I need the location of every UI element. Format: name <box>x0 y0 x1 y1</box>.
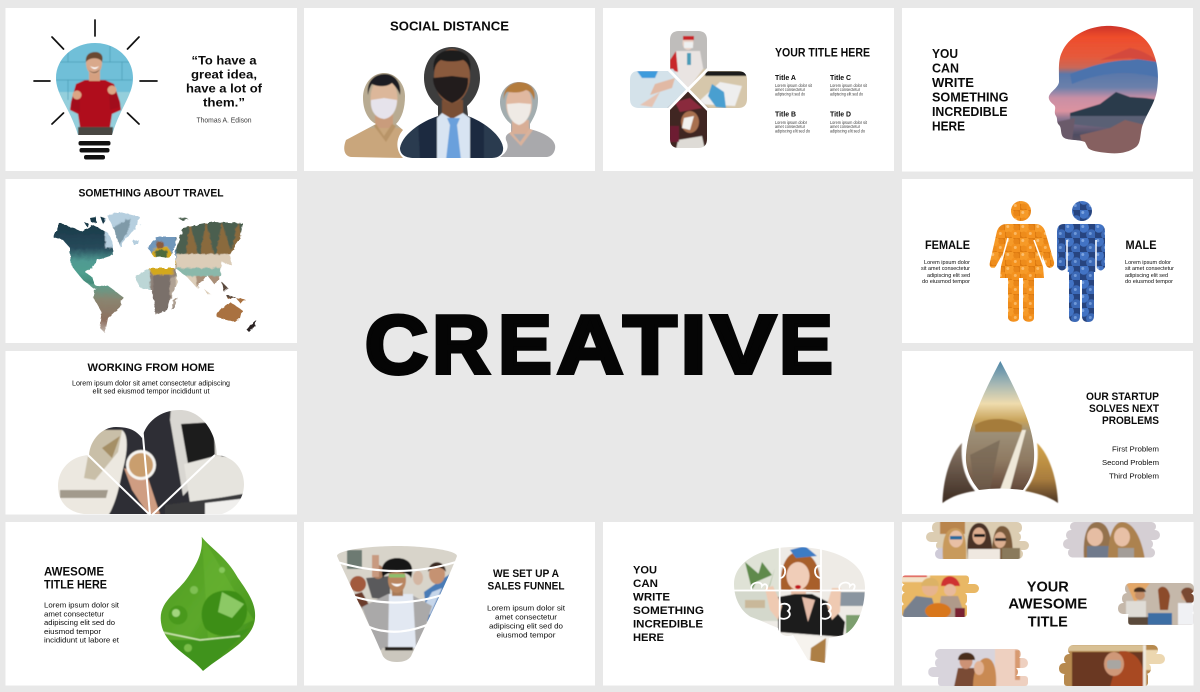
funnel band lines <box>337 562 456 632</box>
main title: A <box>557 298 623 391</box>
list of problems: Second Problem <box>1102 458 1159 467</box>
text block: Title C: Lorem ipsum dolor sit <box>830 83 868 89</box>
main title: R <box>432 298 490 391</box>
text block: YOU <box>932 47 958 61</box>
list of problems: Third Problem <box>1109 472 1159 480</box>
top quadrant: doctor <box>670 31 707 88</box>
text block: Title C <box>830 73 868 98</box>
divider lines in cloud <box>88 425 215 515</box>
quote: great idea, <box>191 68 257 82</box>
panel: head silhouette <box>902 8 1193 172</box>
text block: Title C: adipiscing elit sed do <box>830 92 863 98</box>
text block: female: sit amet consectetur <box>921 266 970 272</box>
heading: WE SET UP A <box>493 568 559 580</box>
icon: funnel photo <box>335 544 459 664</box>
panel: leaf <box>6 522 297 686</box>
heading: female: FEMALE <box>925 240 970 252</box>
main title: I <box>680 298 706 391</box>
heading: male: MALE <box>1126 240 1157 252</box>
text block: incididunt ut labore et <box>44 636 119 644</box>
brush photo: kids with pumpkin <box>902 576 979 617</box>
text block: amet consectetur <box>44 610 105 618</box>
panel: rocket <box>902 351 1193 514</box>
text block <box>487 604 565 640</box>
heading: TITLE <box>1028 614 1068 630</box>
text block: Title B: adipiscing elit sed do <box>775 128 810 134</box>
text block: Title D: adipiscing elit sed do <box>830 128 865 134</box>
text block: Title A: adipiscing it sed do <box>775 92 805 98</box>
rocket body <box>966 361 1034 490</box>
brush photo: friends on floor <box>1118 583 1194 625</box>
icon: bulb photo of cheering man <box>56 43 133 135</box>
text block: CAN <box>932 62 959 76</box>
heading: SOLVES NEXT <box>1089 403 1159 415</box>
heading: OUR STARTUP <box>1086 391 1159 403</box>
brush photo: three friends <box>925 520 1030 560</box>
bottom quadrant: woman with tissue <box>668 90 708 150</box>
quote: have a lot of <box>186 82 263 96</box>
icon: light rays <box>34 20 157 124</box>
main title: E <box>498 298 552 391</box>
icon: speech brain puzzle photo <box>732 545 866 665</box>
text block: Title B <box>775 110 810 134</box>
text block: adipiscing elit sed do <box>489 622 563 630</box>
heading: SALES FUNNEL <box>488 580 565 592</box>
text block: Title D: Lorem ipsum dolor sit <box>830 120 868 126</box>
panel: brush photos <box>900 520 1196 687</box>
panel: gender figures <box>902 179 1193 343</box>
panel: sales funnel <box>304 522 595 686</box>
quote <box>186 54 263 110</box>
list of problems: First Problem <box>1112 444 1159 454</box>
right quadrant: keyboard and glove <box>688 69 748 110</box>
text block <box>72 378 230 396</box>
text block: male: sit amet consectetur <box>1125 266 1174 272</box>
text block: Title A <box>775 73 813 98</box>
text block <box>633 564 704 644</box>
icon: bulb base <box>78 141 110 160</box>
cross photo collage <box>628 29 750 150</box>
text block: YOU <box>633 564 657 576</box>
text block: Title C: amet consectetur <box>830 87 860 93</box>
text block: INCREDIBLE <box>633 618 704 630</box>
brush photo: woman with camera <box>1059 645 1165 686</box>
heading: YOUR <box>1027 578 1069 596</box>
quote: “To have a <box>192 54 257 68</box>
text block: SOMETHING <box>932 90 1008 104</box>
text block: eiusmod tempor <box>44 627 102 636</box>
text block: Lorem ipsum dolor sit <box>487 604 565 612</box>
main title: C <box>365 298 428 391</box>
text block: eiusmod tempor <box>496 630 556 640</box>
icon: rocket photo <box>942 358 1058 503</box>
text block: elit sed eiusmod tempor incididunt ut <box>92 386 210 396</box>
text block: Lorem ipsum dolor sit <box>44 600 119 610</box>
panel: social distance <box>304 8 595 171</box>
icon: female figure <box>990 201 1054 322</box>
person: left with mask <box>344 73 405 158</box>
text block: adipiscing elit sed do <box>44 618 115 627</box>
text block <box>932 47 1008 134</box>
text block: WRITE <box>932 76 974 90</box>
right fin <box>1025 443 1058 503</box>
puzzle lines <box>734 547 865 636</box>
text block: male <box>1125 260 1174 285</box>
heading: TITLE HERE <box>44 578 107 592</box>
text block: HERE <box>932 120 965 134</box>
heading: AWESOME <box>1008 596 1087 612</box>
person: centre with black mask <box>400 47 504 158</box>
left fin <box>942 443 975 503</box>
brush photo: two girls <box>1063 522 1160 558</box>
icon: male figure <box>1057 201 1105 322</box>
person: right with mask <box>500 82 556 157</box>
world map photo <box>54 212 256 333</box>
text block: WRITE <box>633 592 671 604</box>
heading: PROBLEMS <box>1102 415 1159 427</box>
text block: Title B: amet consectetur <box>775 124 805 130</box>
icon: head with sunset landscape <box>1045 24 1161 156</box>
text block: Title D: amet consectetur <box>830 124 860 130</box>
panel: puzzle brain <box>603 522 894 686</box>
text block: Title B: Lorem ipsum dolor <box>775 120 807 126</box>
quote: them.” <box>203 96 245 110</box>
heading: AWESOME <box>44 564 104 578</box>
text block: male: do eiusmod tempor <box>1125 279 1173 285</box>
panel: lightbulb quote <box>6 8 297 171</box>
heading: YOUR TITLE HERE <box>775 48 870 60</box>
text block: Title D <box>830 110 868 134</box>
text block: Lorem ipsum dolor sit amet consectetur adipiscing <box>72 378 230 388</box>
text block: female: adipiscing elit sed <box>927 273 970 279</box>
panel: travel map <box>6 179 297 343</box>
text block: Title C: Title C <box>830 73 852 82</box>
icon: leaf with water drops <box>158 534 258 674</box>
text block: male: adipiscing elit sed <box>1125 273 1168 279</box>
panel: working from home <box>6 351 297 518</box>
heading <box>488 568 565 592</box>
heading: WORKING FROM HOME <box>88 362 214 374</box>
panel: cross <box>603 8 894 171</box>
text block: HERE <box>633 632 665 644</box>
text block: Title D: Title D <box>830 110 852 118</box>
main title: E <box>779 298 833 391</box>
text block: Title A: Lorem ipsum dolor sit <box>775 83 813 89</box>
heading <box>1008 578 1087 630</box>
text block: male: Lorem ipsum dolor <box>1125 260 1171 266</box>
text block: female: Lorem ipsum dolor <box>924 260 970 266</box>
quote author: Thomas A. Edison <box>196 118 252 124</box>
heading <box>44 564 107 592</box>
text block: SOMETHING <box>633 605 704 617</box>
list of problems <box>1102 444 1159 480</box>
text block: INCREDIBLE <box>932 105 1008 119</box>
heading: SOMETHING ABOUT TRAVEL <box>78 188 224 200</box>
main title: V <box>711 298 776 391</box>
text block: female <box>921 260 970 285</box>
text block <box>44 600 119 644</box>
heading <box>1086 391 1159 427</box>
text block: Title A: Title A <box>775 73 797 82</box>
brush photo: couple <box>928 647 1030 687</box>
cloud photo collage <box>55 408 250 518</box>
text block: CAN <box>633 578 658 590</box>
text block: Title B: Title B <box>775 110 797 118</box>
main title: T <box>623 298 677 391</box>
heading: SOCIAL DISTANCE <box>390 20 509 34</box>
left quadrant: hands <box>628 69 688 110</box>
text block: amet consectetur <box>495 612 558 622</box>
text block: Title A: amet consectetur <box>775 87 805 93</box>
text block: female: do eiusmod tempor <box>922 279 970 285</box>
